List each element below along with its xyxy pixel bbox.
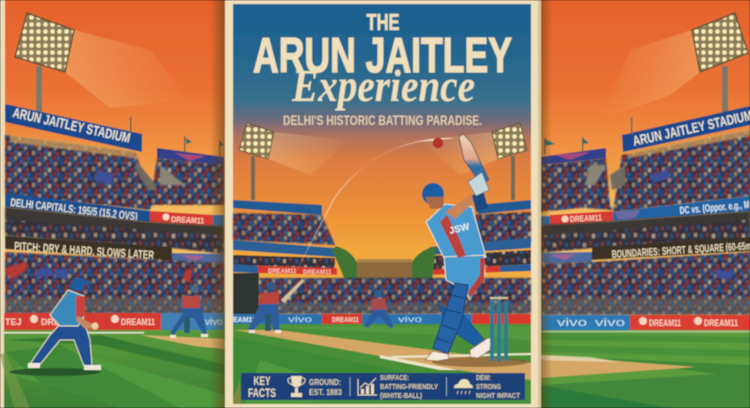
- title line: Experience: Experience: [291, 60, 475, 111]
- left floodlight: [15, 13, 190, 114]
- ball trail: [290, 138, 455, 283]
- fact: ground: GROUND:: [309, 377, 341, 387]
- advertising boards, right: [540, 315, 750, 330]
- score banner: DC vs Opponent: DREAM11: [570, 212, 602, 224]
- trees and fort: [332, 246, 436, 282]
- stand banner: Arun Jaitley Stadium, left: ARUN JAITLEY STADIUM: [11, 104, 132, 146]
- fact: surface: BATTING-FRIENDLY: [380, 382, 438, 391]
- outfield grass, left: [0, 330, 226, 408]
- fact: surface: (WHITE-BALL): [380, 391, 422, 400]
- distant batter and stumps, left: [170, 285, 208, 338]
- advertising boards, right: DREAM11: [649, 318, 682, 329]
- poster image: [233, 4, 531, 404]
- boundaries banner: [540, 237, 750, 263]
- batter, foreground: [422, 172, 491, 361]
- advertising boards, left: [4, 313, 226, 330]
- lower crowd, right: [540, 252, 750, 315]
- score banner: Delhi Capitals: DELHI CAPITALS: 195/5 (15.2 OVS): [10, 197, 138, 223]
- upper stand crowd, right: [540, 128, 750, 212]
- icon: rising chart: [358, 378, 377, 395]
- advertising boards, poster: DREAM11: [332, 317, 359, 324]
- shirt: [426, 204, 486, 258]
- advertising boards, left: DREAM11: [121, 317, 155, 327]
- key facts bar: [241, 373, 525, 400]
- upper stand crowd, left: [5, 135, 224, 210]
- red shirt detail: [440, 215, 468, 258]
- fact: dew: DEW:: [476, 373, 491, 382]
- advertising boards, left: TEJ: [5, 317, 22, 327]
- center right floodlight: [420, 123, 527, 200]
- fact: surface: [380, 373, 438, 400]
- poster paper: [225, 0, 541, 408]
- advertising boards, left: DREAM11: [41, 317, 84, 327]
- wicketkeeper-side batter at far crease: [248, 279, 304, 333]
- fielder, foreground: [9, 278, 101, 376]
- back leg: [438, 305, 487, 348]
- advertising boards, right: DREAM11: [704, 318, 739, 329]
- key facts label: FACTS: [248, 386, 276, 400]
- middle tier crowd, left: [5, 207, 224, 254]
- advertising boards, poster: vivo: [288, 315, 313, 324]
- background stands, left side of poster: [233, 200, 337, 314]
- score banner: Delhi Capitals: DREAM11: [171, 214, 205, 226]
- fact: ground: EST. 1883: [309, 387, 342, 397]
- middle tier crowd, right: [540, 211, 750, 253]
- non-striker at far end: [364, 290, 394, 328]
- advertising boards, right: vivo: [595, 317, 625, 329]
- fact: dew: [476, 373, 520, 400]
- score banner: DC vs Opponent: [540, 196, 750, 225]
- lower crowd, left: [5, 252, 225, 314]
- fact: ground: [309, 377, 342, 397]
- fact: dew: NIGHT IMPACT: [476, 391, 520, 400]
- arm: [445, 194, 476, 219]
- batter, foreground: JSW: [448, 221, 471, 237]
- left panel: stadium scene: [0, 0, 226, 408]
- outfield and pitch, poster: [233, 324, 531, 404]
- background stands, left side of poster: DREAM11: [268, 269, 297, 275]
- fact: surface: SURFACE:: [380, 373, 409, 382]
- center left floodlight: [239, 123, 350, 200]
- advertising boards, left: vivo: [205, 317, 223, 328]
- front pad: [433, 283, 468, 354]
- stadium crowd behind pitch: [259, 278, 531, 314]
- outfield grass, right: [540, 330, 750, 408]
- trousers: [444, 255, 485, 298]
- background stands, left side of poster: DREAM11: [303, 270, 332, 276]
- icon: trophy: [288, 376, 305, 397]
- advertising boards, right: vivo: [557, 317, 587, 329]
- fact: dew: STRONG: [476, 382, 501, 391]
- title: [253, 9, 512, 128]
- subtitle: DELHI'S HISTORIC BATTING PARADISE.: [283, 112, 482, 128]
- stand banner: Arun Jaitley Stadium, left: [5, 104, 142, 152]
- key facts label: [248, 374, 276, 400]
- right floodlight: [600, 13, 748, 120]
- cricket ball: [433, 138, 443, 148]
- title line: Arun Jaitley: ARUN JAITLEY: [253, 29, 512, 83]
- key facts label: KEY: [254, 374, 270, 388]
- advertising boards, poster: [233, 314, 531, 324]
- right panel: stadium scene: [538, 0, 750, 408]
- title line: The: THE: [366, 9, 400, 35]
- score banner: Delhi Capitals: [5, 193, 224, 226]
- flag banner, right: [540, 137, 606, 165]
- advertising boards, poster: EAM11: [233, 317, 256, 324]
- helmet and face: [422, 183, 444, 205]
- cricket bat: [459, 134, 489, 184]
- pitch banner: PITCH: DRY & HARD, SLOWS LATER: [14, 239, 155, 262]
- background stands, right side of poster: [428, 200, 531, 275]
- flag banner, left: [130, 117, 224, 165]
- icon: rain cloud: [454, 379, 473, 394]
- stumps: [490, 297, 508, 362]
- advertising boards, poster: vivo: [398, 315, 423, 324]
